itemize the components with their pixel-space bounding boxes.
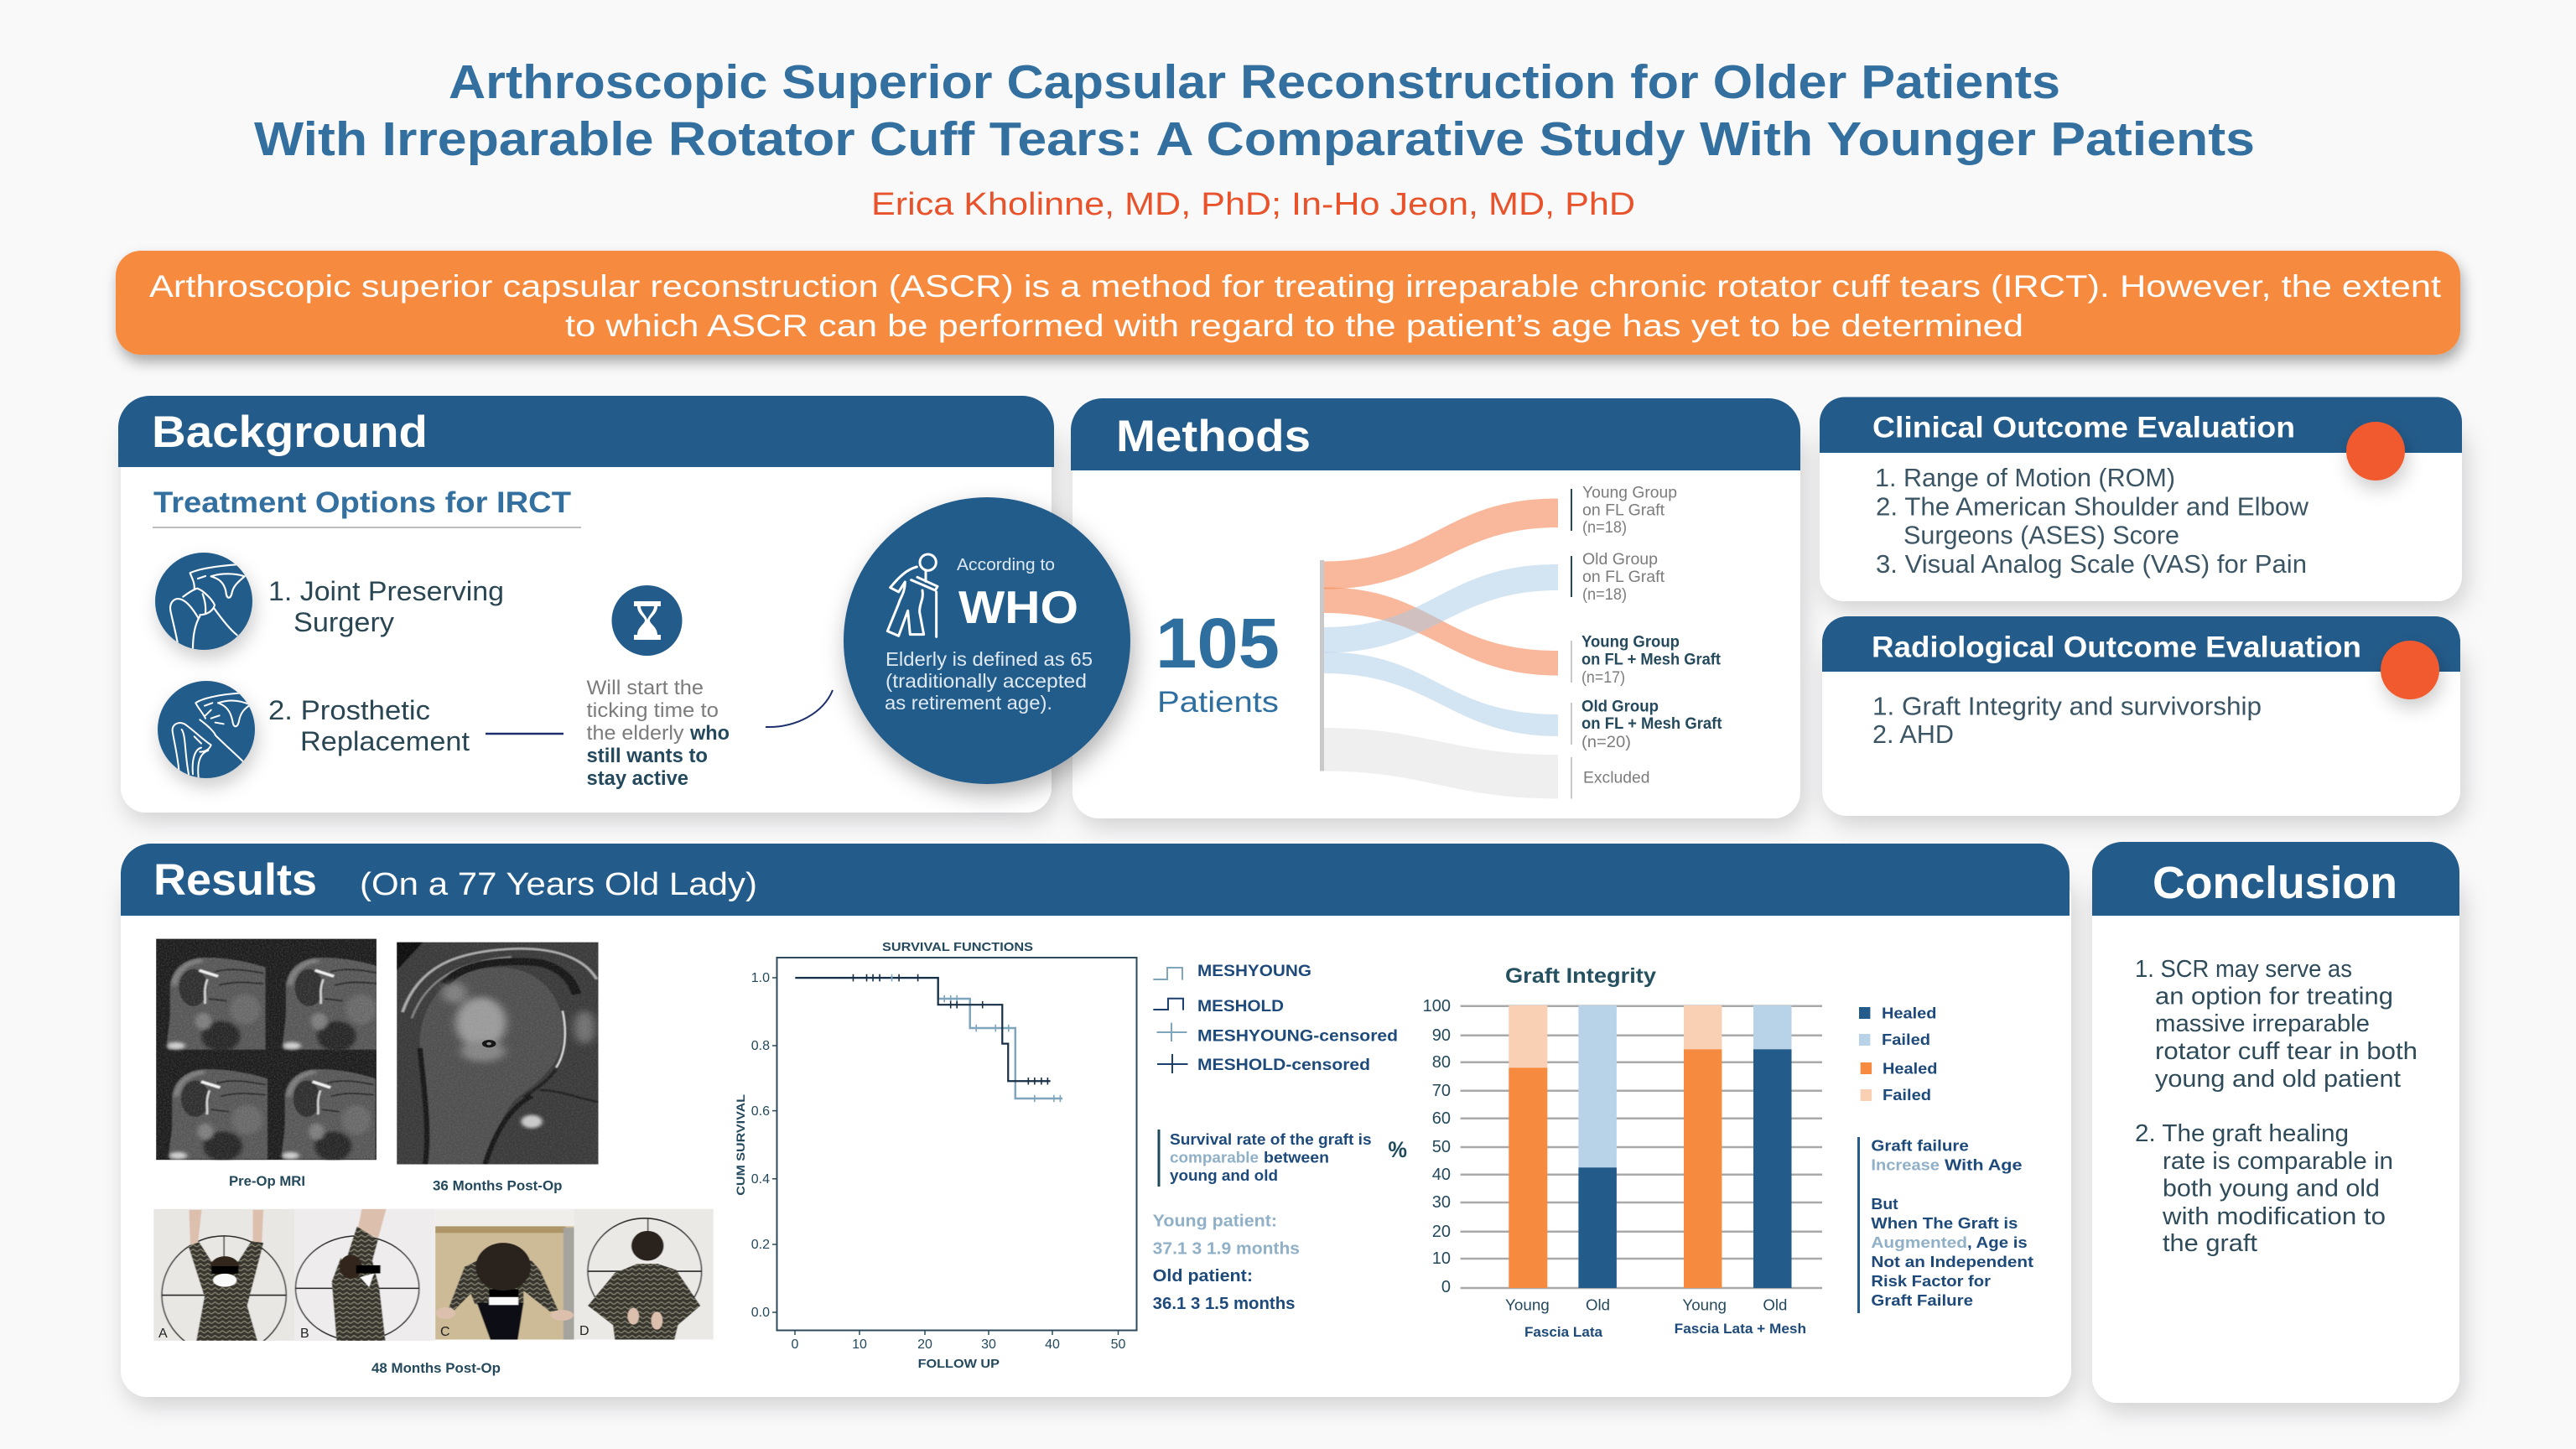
legend: graft integrity: Failed — [1883, 1086, 1931, 1104]
WHO callout: (traditionally accepted — [886, 670, 1087, 692]
authors: Erica Kholinne, MD, PhD; In-Ho Jeon, MD, PhD — [871, 187, 1635, 222]
chart: graft integrity: 10 — [1432, 1249, 1451, 1268]
list: radiological outcomes: 2. AHD — [1872, 719, 1954, 749]
survival months: Old patient: — [1153, 1267, 1253, 1285]
chart: graft integrity: 70 — [1432, 1082, 1451, 1100]
legend: survival curves: MESHOLD-censored — [1197, 1057, 1370, 1074]
icon: hourglass — [612, 585, 683, 656]
icon: shoulder joint preserving — [155, 553, 252, 650]
photo B — [290, 1207, 439, 1345]
group label: old mesh: (n=20) — [1581, 734, 1631, 751]
panel: clinical outcome evaluation — [1820, 397, 2462, 601]
group label: old FL: Old Group — [1582, 551, 1658, 569]
panel: background — [118, 396, 1054, 813]
title — [254, 55, 2255, 166]
treatment options list: Replacement — [300, 726, 470, 756]
text: ticking time: who — [689, 722, 730, 745]
group label: old mesh — [1571, 698, 1722, 751]
bar: old fascia lata plus mesh — [1753, 1005, 1791, 1288]
bar: young fascia lata — [1509, 1005, 1547, 1288]
heading: clinical: Clinical Outcome Evaluation — [1872, 411, 2295, 444]
panel: conclusion — [2092, 842, 2459, 1403]
text: conclusion 1: massive irreparable — [2155, 1010, 2370, 1037]
legend: survival curves — [1153, 963, 1398, 1074]
heading: methods: Methods — [1116, 412, 1311, 461]
heading: radiological: Radiological Outcome Evaluation — [1872, 631, 2361, 664]
callout: survival rate: comparable — [1170, 1149, 1259, 1166]
group label: young mesh: on FL + Mesh Graft — [1581, 651, 1722, 668]
image: pre-op MRI — [156, 939, 382, 1161]
legend: graft integrity: Healed — [1883, 1060, 1937, 1078]
orange intro banner — [116, 251, 2460, 355]
survival months — [1153, 1213, 1300, 1313]
group label: young mesh — [1571, 634, 1722, 687]
chart: survival functions: 0.2 — [751, 1238, 770, 1252]
photo D — [571, 1207, 717, 1342]
caption: pre-op: Pre-Op MRI — [229, 1173, 305, 1189]
chart: graft integrity: 90 — [1432, 1026, 1451, 1045]
chart: survival functions: 10 — [852, 1337, 867, 1352]
chart: survival functions: 50 — [1111, 1337, 1125, 1352]
group label: young FL: on FL Graft — [1582, 501, 1665, 519]
chart: graft integrity: Young — [1505, 1297, 1550, 1314]
chart: graft integrity: Old — [1763, 1297, 1787, 1314]
caption: 48 months: 48 Months Post-Op — [371, 1360, 501, 1376]
list: radiological outcomes: 1. Graft Integrity and survivorship — [1872, 692, 2262, 721]
list: clinical outcomes — [1875, 463, 2309, 579]
bar: old fascia lata — [1578, 1005, 1617, 1288]
text: conclusion 2: the graft — [2163, 1230, 2257, 1257]
callout: graft failure note: Augmented — [1871, 1233, 1967, 1251]
panel: results — [121, 844, 2071, 1397]
chart: survival functions: 1.0 — [751, 971, 770, 985]
legend: survival curves: MESHOLD — [1197, 998, 1284, 1015]
group label: excluded — [1571, 757, 1650, 798]
group label: old mesh: Old Group — [1581, 698, 1659, 716]
heading: background: Background — [152, 408, 428, 457]
heading: results: Results — [153, 855, 317, 905]
chart: survival functions: 40 — [1045, 1337, 1060, 1352]
legend: graft integrity: Healed — [1882, 1005, 1937, 1022]
text: ticking time: stay active — [587, 767, 688, 790]
group label: old FL — [1571, 551, 1665, 604]
text: ticking time: the elderly — [587, 722, 684, 745]
photo A — [149, 1207, 299, 1354]
group label: young FL — [1571, 485, 1677, 537]
image: post-op range of motion photographs: C — [440, 1325, 450, 1339]
image: post-op range of motion photographs: B — [300, 1327, 309, 1341]
chart: graft integrity: 60 — [1432, 1109, 1451, 1128]
caption: 36 months: 36 Months Post-Op — [433, 1178, 562, 1194]
text: ticking time: ticking time to — [587, 699, 719, 722]
callout: survival rate — [1157, 1130, 1372, 1187]
panel: methods — [1071, 398, 1800, 818]
chart: graft integrity: 30 — [1432, 1193, 1451, 1212]
chart: graft integrity: Fascia Lata + Mesh — [1675, 1321, 1806, 1337]
chart: graft integrity: 50 — [1432, 1138, 1451, 1156]
group label: young FL: (n=18) — [1582, 519, 1627, 537]
text: conclusion 2: 2. The graft healing — [2135, 1120, 2349, 1147]
heading: conclusion: Conclusion — [2153, 858, 2397, 908]
chart: graft integrity: Graft Integrity — [1505, 964, 1656, 988]
list: radiological outcomes — [1872, 692, 2262, 749]
treatment options list: 2. Prosthetic — [268, 695, 430, 725]
callout: graft failure note: Risk Factor for — [1871, 1272, 1991, 1290]
patient count: 105 — [1156, 604, 1280, 683]
callout: graft failure note: With Age — [1945, 1156, 2023, 1174]
WHO callout: Elderly is defined as 65 — [886, 648, 1093, 670]
chart: survival functions: 0.4 — [751, 1172, 770, 1187]
connector line — [486, 733, 564, 735]
text: conclusion 1: an option for treating — [2155, 984, 2393, 1010]
text: conclusion 1: rotator cuff tear in both — [2155, 1038, 2418, 1065]
icon: shoulder prosthesis — [158, 681, 255, 778]
chart: survival functions: 0.6 — [751, 1104, 770, 1119]
callout: graft failure note: Graft Failure — [1871, 1291, 1973, 1309]
chart: survival functions: 0.0 — [751, 1306, 770, 1320]
chart: graft integrity: 20 — [1432, 1223, 1451, 1241]
treatment options list: 1. Joint Preserving — [268, 576, 504, 606]
text: ticking time: Will start the — [587, 677, 704, 699]
WHO callout: as retirement age). — [885, 692, 1052, 714]
chart: survival functions — [734, 940, 1137, 1371]
group label: old FL: on FL Graft — [1582, 569, 1665, 586]
heading: results — [153, 855, 757, 905]
text: conclusion 2: with modification to — [2162, 1203, 2386, 1230]
callout: survival rate: between — [1264, 1149, 1329, 1166]
chart: survival functions: 0 — [792, 1337, 799, 1352]
text: conclusion 2: rate is comparable in — [2163, 1148, 2393, 1175]
legend: graft integrity — [1859, 1005, 1937, 1104]
subheading: treatment options: Treatment Options for IRCT — [153, 486, 571, 519]
callout: graft failure note: Increase — [1871, 1156, 1940, 1174]
callout: graft failure note: When The Graft is — [1871, 1214, 2018, 1232]
survival months: 37.1 3 1.9 months — [1153, 1240, 1300, 1259]
treatment options list: Surgery — [293, 607, 394, 637]
callout: survival rate: young and old — [1170, 1167, 1278, 1184]
list: clinical outcomes: Surgeons (ASES) Score — [1903, 520, 2179, 550]
legend: survival curves: MESHYOUNG-censored — [1197, 1027, 1398, 1045]
WHO callout: WHO — [958, 581, 1078, 633]
chart: survival functions: SURVIVAL FUNCTIONS — [882, 940, 1033, 954]
group label: old FL: (n=18) — [1582, 586, 1627, 604]
chart: graft integrity: 100 — [1423, 997, 1451, 1015]
orange dot — [2381, 641, 2439, 699]
percent axis label: % — [1388, 1137, 1407, 1162]
image: 36 month MRI — [397, 943, 599, 1165]
connector curve — [766, 690, 833, 727]
heading: results: (On a 77 Years Old Lady) — [360, 867, 757, 902]
legend: graft integrity: Failed — [1882, 1031, 1930, 1048]
WHO callout — [844, 497, 1130, 784]
survival curves — [795, 974, 1062, 1102]
list: clinical outcomes: 3. Visual Analog Scale (VAS) for Pain — [1876, 549, 2307, 579]
patient count — [1156, 604, 1280, 719]
image: post-op range of motion photographs: D — [579, 1324, 589, 1338]
treatment options list — [268, 576, 504, 756]
group label: young FL: Young Group — [1582, 485, 1677, 501]
list: clinical outcomes: 1. Range of Motion (ROM) — [1875, 463, 2175, 492]
title: With Irreparable Rotator Cuff Tears: A Comparative Study With Younger Patients — [254, 112, 2255, 166]
chart: survival functions: 30 — [981, 1337, 996, 1352]
chart: graft integrity: 40 — [1432, 1166, 1451, 1184]
group label: young mesh: Young Group — [1581, 634, 1680, 651]
chart: survival functions: 20 — [917, 1337, 932, 1352]
callout: graft failure note: Graft failure — [1871, 1137, 1969, 1155]
chart: graft integrity — [1423, 964, 1822, 1340]
chart: graft integrity: 0 — [1441, 1278, 1451, 1296]
chart: graft integrity: 80 — [1432, 1053, 1451, 1072]
text: conclusion 1: young and old patient — [2155, 1066, 2401, 1093]
WHO callout: According to — [957, 556, 1055, 574]
chart: graft integrity: Young — [1682, 1297, 1727, 1314]
group label: young mesh: (n=17) — [1581, 669, 1625, 687]
chart: survival functions: 0.8 — [751, 1039, 770, 1053]
callout: graft failure note — [1857, 1137, 2033, 1313]
bar: young fascia lata plus mesh — [1684, 1005, 1722, 1288]
text: ticking time — [587, 677, 730, 790]
photo C — [432, 1207, 579, 1343]
text: conclusion 2 — [2135, 1120, 2393, 1257]
chart: survival functions: CUM SURVIVAL — [734, 1094, 747, 1196]
callout: graft failure note: , Age is — [1967, 1233, 2028, 1251]
sankey diagram — [1320, 498, 1558, 798]
image: post-op range of motion photographs: A — [158, 1327, 168, 1341]
title: Arthroscopic Superior Capsular Reconstruction for Older Patients — [449, 55, 2060, 109]
panel: radiological outcome evaluation — [1822, 616, 2460, 816]
list: clinical outcomes: 2. The American Shoulder and Elbow — [1876, 491, 2309, 521]
text: conclusion 1: 1. SCR may serve as — [2135, 956, 2352, 983]
chart: survival functions: FOLLOW UP — [918, 1357, 1000, 1371]
orange intro banner: Arthroscopic superior capsular reconstruction (ASCR) is a method for treating irreparable chronic rotator cuff tears (IRCT). However, the extent — [149, 269, 2442, 304]
icon: elderly person with cane — [887, 554, 937, 636]
text: conclusion 1 — [2135, 956, 2418, 1093]
legend: survival curves: MESHYOUNG — [1197, 963, 1311, 980]
text: conclusion 2: both young and old — [2163, 1176, 2380, 1202]
survival months: Young patient: — [1153, 1213, 1277, 1231]
text: ticking time: still wants to — [587, 745, 708, 767]
image: post-op range of motion photographs — [149, 1207, 717, 1354]
patient count: Patients — [1157, 686, 1279, 719]
chart: graft integrity: Fascia Lata — [1524, 1324, 1603, 1340]
callout: graft failure note: But — [1871, 1195, 1898, 1213]
group label: excluded: Excluded — [1583, 770, 1650, 787]
survival months: 36.1 3 1.5 months — [1153, 1295, 1295, 1313]
group label: old mesh: on FL + Mesh Graft — [1581, 715, 1722, 733]
chart: graft integrity: Old — [1586, 1297, 1610, 1314]
callout: survival rate: Survival rate of the graft is — [1170, 1131, 1372, 1148]
orange dot — [2346, 422, 2405, 480]
callout: graft failure note: Not an Independent — [1871, 1253, 2033, 1270]
orange intro banner: to which ASCR can be performed with regard to the patient’s age has yet to be determined — [565, 309, 2023, 343]
